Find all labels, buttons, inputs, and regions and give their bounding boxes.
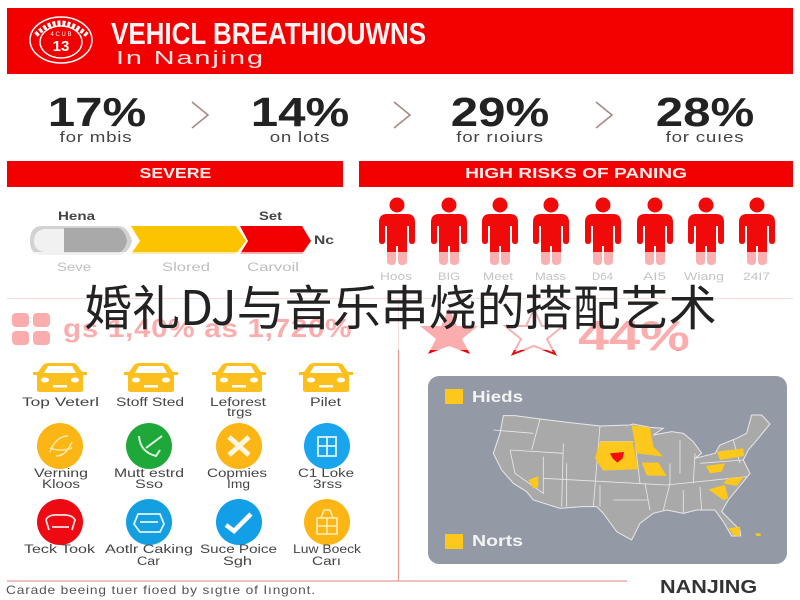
- item: pilot: Pilet: [310, 397, 342, 409]
- severity chevron bar: Carvoil: [247, 262, 299, 274]
- item: must: Mutt estrd: [114, 468, 184, 480]
- people labels: AI5: [643, 271, 666, 283]
- subtitle: In Nanjing: [116, 48, 265, 68]
- item: leforest: trgs: [227, 407, 252, 419]
- item: warning: Verning: [34, 468, 88, 480]
- severity chevron bar: Seve: [57, 262, 91, 274]
- labels: Nc: [314, 235, 335, 247]
- item: teck: [24, 499, 95, 556]
- item: law: [293, 499, 361, 568]
- stat: 14%: on lots: [270, 129, 330, 146]
- stat: 28%: 28%: [656, 89, 754, 135]
- people labels: [380, 271, 770, 283]
- item: autor: Car: [137, 556, 160, 568]
- stat: 29%: 29%: [451, 89, 549, 135]
- people labels: Wiang: [684, 271, 724, 283]
- title: VEHICL BREATHIOUWNS: [111, 16, 426, 51]
- item: must: [114, 423, 184, 491]
- labels: Hena: [58, 211, 96, 223]
- item: must: Sso: [135, 479, 163, 491]
- icon: filled star: [420, 308, 478, 354]
- footer label: NANJING: [660, 577, 757, 597]
- item: leforest: Leforest: [210, 397, 267, 409]
- item: store: [116, 363, 184, 409]
- map legend: hieds: Hieds: [472, 389, 523, 406]
- item: cl lake: C1 Loke: [298, 468, 354, 480]
- item: law: Luw Boeck: [293, 544, 361, 556]
- overlay title: 婚礼DJ与音乐串烧的搭配艺术: [84, 269, 717, 339]
- item: autor: Aotlr Caking: [105, 544, 193, 556]
- icon: round seal badge: 13: [53, 38, 69, 55]
- people labels: 24I7: [743, 271, 770, 283]
- heading: high risks: [359, 161, 793, 187]
- stat: 17%: for mbis: [60, 129, 132, 146]
- heading: severe: SEVERE: [139, 166, 211, 182]
- US map: [493, 415, 770, 540]
- item: sute: [200, 499, 277, 568]
- arrow: [394, 102, 412, 128]
- map panel: [428, 376, 787, 564]
- icon: round seal badge: [29, 16, 93, 64]
- item: cl lake: 3rss: [313, 479, 342, 491]
- red segment: [240, 226, 311, 254]
- pictogram row: people: [379, 198, 775, 265]
- labels: [58, 211, 335, 247]
- arrow: [192, 102, 210, 128]
- header banner: [7, 8, 793, 74]
- map legend: norts: [445, 533, 523, 550]
- item: store: Stoff Sted: [116, 397, 184, 409]
- map legend: norts: Norts: [472, 533, 523, 550]
- car segment: [30, 226, 132, 255]
- item: top vehicle: [22, 363, 99, 409]
- people labels: Mass: [535, 271, 567, 283]
- map legend: hieds: [445, 389, 523, 406]
- item: copies: Copmies: [207, 468, 267, 480]
- stat text: percent comparison: gs 1,40% as 1,720%: [63, 313, 352, 343]
- people labels: Hoos: [380, 271, 413, 283]
- item: law: Carı: [312, 556, 341, 568]
- item: copies: [207, 423, 267, 491]
- stat: 17%: 17%: [48, 89, 146, 135]
- people labels: Meet: [483, 271, 513, 283]
- item: warning: Kloos: [42, 479, 80, 491]
- stat: 29%: for rıoiurs: [456, 129, 544, 146]
- item: autor: [105, 499, 193, 568]
- stat: 28%: for cuıes: [666, 129, 744, 146]
- icon: outline star: [503, 311, 562, 356]
- stat: 44%: 44%: [578, 312, 690, 359]
- people labels: D64: [592, 271, 613, 283]
- item: sute: Sgh: [223, 556, 252, 568]
- item: warning: [34, 423, 88, 491]
- item: pilot: [299, 363, 353, 409]
- heading: high risks: HIGH RISKS OF PANING: [465, 166, 687, 182]
- severity chevron bar: [30, 211, 335, 274]
- item: cl lake: [298, 423, 354, 491]
- item: sute: Suce Poice: [200, 544, 277, 556]
- footnote: Carade beeing tuer fioed by sıgtıe of Iıngont.: [6, 583, 316, 597]
- heading: severe: [7, 161, 343, 187]
- icon: grid tiles: [12, 313, 50, 345]
- item: teck: Teck Took: [24, 544, 95, 556]
- stat: 14%: 14%: [251, 89, 349, 135]
- severity chevron bar: Slored: [162, 262, 210, 274]
- yellow segment: [131, 226, 246, 254]
- section rule: [7, 298, 793, 582]
- icon: round seal badge: 4 C U B: [50, 32, 72, 38]
- people labels: BIG: [438, 271, 460, 283]
- item: leforest: [210, 363, 267, 419]
- arrow: [596, 102, 614, 128]
- item: copies: Img: [227, 479, 250, 491]
- fade band: [0, 252, 800, 350]
- labels: Set: [259, 211, 282, 223]
- icon grid: [22, 363, 361, 568]
- item: top vehicle: Top Veterl: [22, 397, 99, 409]
